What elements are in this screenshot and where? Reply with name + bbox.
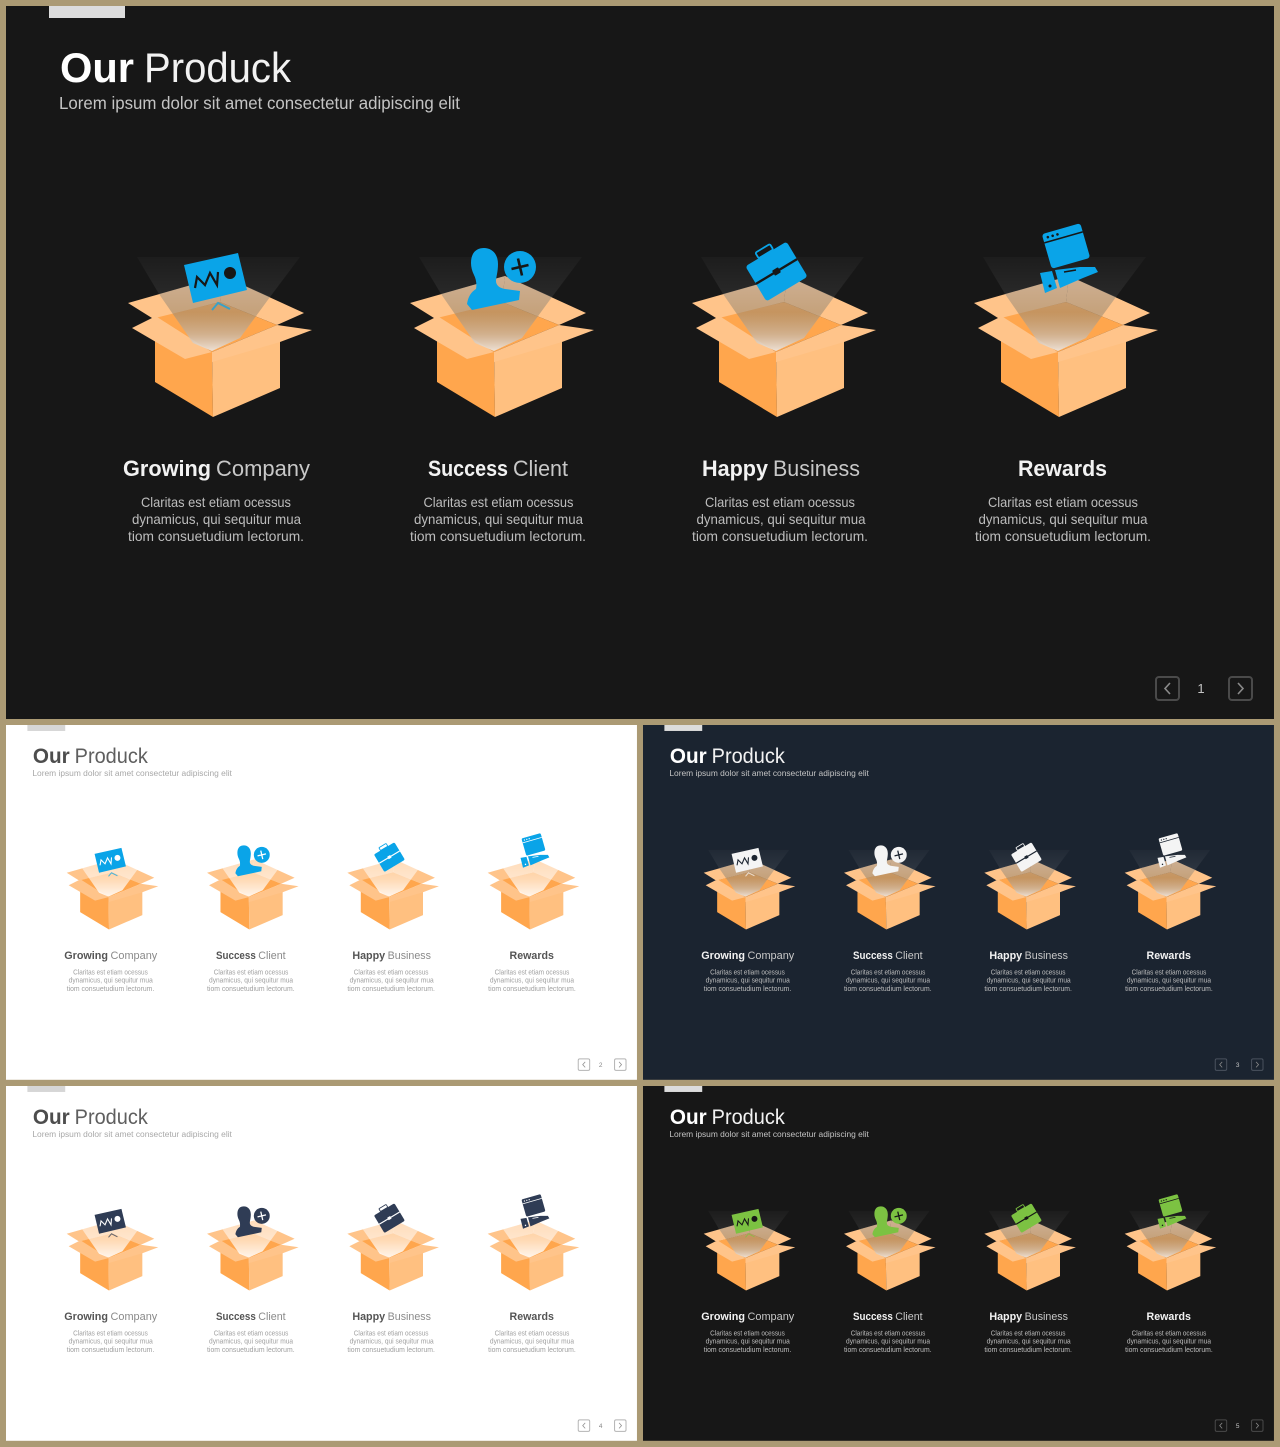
product: Happy Business xyxy=(347,1200,439,1354)
heading: Success xyxy=(853,1311,893,1323)
heading xyxy=(216,950,286,962)
description: Claritas est etiam ocessus xyxy=(495,969,570,976)
icon: briefcase xyxy=(372,1200,405,1233)
heading: Company xyxy=(110,1311,158,1323)
description: dynamicus, qui sequitur mua xyxy=(209,1339,293,1346)
icon: briefcase xyxy=(372,839,405,872)
description: Claritas est etiam ocessus xyxy=(214,1330,289,1337)
description: dynamicus, qui sequitur mua xyxy=(987,978,1071,985)
header tab xyxy=(49,6,125,18)
heading xyxy=(702,456,860,481)
heading: Business xyxy=(1025,1311,1068,1323)
box illustration xyxy=(704,850,795,930)
description: tiom consuetudium lectorum. xyxy=(844,1347,932,1354)
box illustration xyxy=(347,859,439,930)
description xyxy=(984,969,1072,993)
box illustration xyxy=(1125,1211,1216,1291)
description: dynamicus, qui sequitur mua xyxy=(706,1339,790,1346)
product: Rewards xyxy=(1125,1194,1216,1354)
heading xyxy=(216,1311,286,1323)
description: tiom consuetudium lectorum. xyxy=(975,528,1151,544)
product: Happy Business xyxy=(692,236,876,544)
title: Produck xyxy=(75,745,148,768)
heading xyxy=(853,950,923,962)
description xyxy=(347,1330,435,1354)
description: tiom consuetudium lectorum. xyxy=(67,1347,154,1354)
description: Claritas est etiam ocessus xyxy=(1132,969,1207,976)
description: tiom consuetudium lectorum. xyxy=(984,986,1072,993)
icon: presentation board xyxy=(95,848,126,876)
header tab xyxy=(27,1086,65,1092)
title xyxy=(33,745,148,768)
description: tiom consuetudium lectorum. xyxy=(67,986,154,993)
box illustration xyxy=(347,1220,439,1291)
description: dynamicus, qui sequitur mua xyxy=(1127,1339,1211,1346)
description xyxy=(410,494,586,544)
icon: browser window and hand xyxy=(1158,1194,1186,1229)
heading: Company xyxy=(747,1311,795,1323)
heading: Rewards xyxy=(510,1311,554,1323)
product: Rewards xyxy=(1125,833,1216,993)
description: dynamicus, qui sequitur mua xyxy=(350,978,434,985)
panel: white slide 4 xyxy=(6,1086,637,1441)
description: dynamicus, qui sequitur mua xyxy=(706,978,790,985)
icon: browser window and hand xyxy=(521,833,549,868)
description xyxy=(975,494,1151,544)
subtitle: Lorem ipsum dolor sit amet consectetur adipiscing elit xyxy=(32,1129,232,1139)
box illustration xyxy=(984,1211,1076,1291)
description: tiom consuetudium lectorum. xyxy=(410,528,586,544)
title: Our xyxy=(33,745,70,768)
heading: Rewards xyxy=(1018,456,1107,481)
description: Claritas est etiam ocessus xyxy=(710,969,785,976)
description xyxy=(207,1330,295,1354)
product: Growing Company xyxy=(701,1209,795,1354)
pager: 2 xyxy=(599,1062,603,1069)
product: Success Client xyxy=(410,248,594,544)
product: Happy Business xyxy=(347,839,439,993)
pager: 1 xyxy=(1197,681,1205,696)
pager xyxy=(1215,1420,1263,1431)
description: tiom consuetudium lectorum. xyxy=(1125,986,1213,993)
heading xyxy=(853,1311,923,1323)
heading: Business xyxy=(1025,950,1068,962)
description: tiom consuetudium lectorum. xyxy=(207,986,295,993)
description: dynamicus, qui sequitur mua xyxy=(69,978,153,985)
description xyxy=(704,1330,791,1354)
description: Claritas est etiam ocessus xyxy=(214,969,289,976)
description: tiom consuetudium lectorum. xyxy=(347,1347,435,1354)
description: dynamicus, qui sequitur mua xyxy=(490,978,574,985)
description xyxy=(128,494,304,544)
subtitle: Lorem ipsum dolor sit amet consectetur adipiscing elit xyxy=(32,768,232,778)
subtitle: Lorem ipsum dolor sit amet consectetur adipiscing elit xyxy=(59,93,460,113)
heading: Rewards xyxy=(1147,1311,1191,1323)
description: dynamicus, qui sequitur mua xyxy=(987,1339,1071,1346)
product: Happy Business xyxy=(984,1200,1076,1354)
header tab xyxy=(664,1086,702,1092)
product: Success Client xyxy=(844,845,936,993)
heading xyxy=(352,950,431,962)
icon: presentation board xyxy=(184,253,247,310)
box illustration xyxy=(67,859,158,930)
icon: browser window and hand xyxy=(1158,833,1186,868)
heading: Success xyxy=(428,456,508,481)
product: Rewards xyxy=(488,833,579,993)
description: tiom consuetudium lectorum. xyxy=(692,528,868,544)
heading: Happy xyxy=(352,950,386,962)
icon: presentation board xyxy=(732,848,763,876)
description: tiom consuetudium lectorum. xyxy=(347,986,435,993)
description: Claritas est etiam ocessus xyxy=(73,1330,148,1337)
box illustration xyxy=(844,850,936,930)
icon: briefcase xyxy=(742,236,808,301)
description: dynamicus, qui sequitur mua xyxy=(846,1339,930,1346)
title: Produck xyxy=(712,745,785,768)
heading xyxy=(701,1311,795,1323)
heading: Rewards xyxy=(1147,950,1191,962)
product: Growing Company xyxy=(701,848,795,993)
panel: dark slide 5 with green icons xyxy=(643,1086,1274,1441)
description: Claritas est etiam ocessus xyxy=(141,494,291,510)
box illustration xyxy=(984,850,1076,930)
description: tiom consuetudium lectorum. xyxy=(488,1347,576,1354)
icon: presentation board xyxy=(95,1209,126,1237)
heading: Success xyxy=(216,950,256,962)
title xyxy=(33,1106,148,1129)
heading: Business xyxy=(388,1311,431,1323)
heading: Company xyxy=(216,456,310,481)
subtitle: Lorem ipsum dolor sit amet consectetur adipiscing elit xyxy=(669,1129,869,1139)
heading: Happy xyxy=(702,456,769,481)
box illustration xyxy=(207,1220,299,1291)
box illustration xyxy=(410,257,594,417)
title: Our xyxy=(33,1106,70,1129)
box illustration xyxy=(207,859,299,930)
pager: 4 xyxy=(599,1423,603,1430)
description: tiom consuetudium lectorum. xyxy=(704,986,791,993)
icon: add user xyxy=(467,248,536,310)
description xyxy=(704,969,791,993)
description: tiom consuetudium lectorum. xyxy=(207,1347,295,1354)
description: dynamicus, qui sequitur mua xyxy=(350,1339,434,1346)
description: dynamicus, qui sequitur mua xyxy=(978,511,1148,527)
description xyxy=(984,1330,1072,1354)
description: Claritas est etiam ocessus xyxy=(495,1330,570,1337)
title: Our xyxy=(670,745,707,768)
heading xyxy=(428,456,568,481)
heading xyxy=(352,1311,431,1323)
description: Claritas est etiam ocessus xyxy=(710,1330,785,1337)
box illustration xyxy=(488,1220,579,1291)
description: Claritas est etiam ocessus xyxy=(424,494,574,510)
product: Success Client xyxy=(207,845,299,993)
title: Produck xyxy=(712,1106,785,1129)
description: tiom consuetudium lectorum. xyxy=(1125,1347,1213,1354)
heading: Client xyxy=(895,1311,923,1323)
description: dynamicus, qui sequitur mua xyxy=(846,978,930,985)
description: Claritas est etiam ocessus xyxy=(991,969,1066,976)
description: tiom consuetudium lectorum. xyxy=(488,986,576,993)
description: tiom consuetudium lectorum. xyxy=(984,1347,1072,1354)
description: dynamicus, qui sequitur mua xyxy=(69,1339,153,1346)
pager: 5 xyxy=(1236,1423,1240,1430)
box illustration xyxy=(974,257,1158,417)
title: Produck xyxy=(144,44,292,91)
subtitle: Lorem ipsum dolor sit amet consectetur adipiscing elit xyxy=(669,768,869,778)
icon: add user xyxy=(872,845,907,876)
product: Rewards xyxy=(488,1194,579,1354)
description: dynamicus, qui sequitur mua xyxy=(490,1339,574,1346)
header tab xyxy=(664,725,702,731)
product: Success Client xyxy=(207,1206,299,1354)
heading: Business xyxy=(773,456,860,481)
heading: Client xyxy=(513,456,568,481)
description xyxy=(844,1330,932,1354)
description: tiom consuetudium lectorum. xyxy=(128,528,304,544)
title: Our xyxy=(60,44,134,91)
icon: briefcase xyxy=(1009,1200,1042,1233)
pager xyxy=(578,1420,626,1431)
box illustration xyxy=(704,1211,795,1291)
heading: Client xyxy=(258,1311,286,1323)
box illustration xyxy=(692,257,876,417)
header tab xyxy=(27,725,65,731)
icon: add user xyxy=(235,845,270,876)
description xyxy=(347,969,435,993)
heading: Growing xyxy=(123,456,211,481)
description: dynamicus, qui sequitur mua xyxy=(132,511,301,527)
heading xyxy=(123,456,310,481)
heading: Company xyxy=(747,950,795,962)
description: Claritas est etiam ocessus xyxy=(988,494,1138,510)
product: Rewards xyxy=(974,223,1158,544)
product: Happy Business xyxy=(984,839,1076,993)
icon: browser window and hand xyxy=(1040,223,1098,293)
heading xyxy=(701,950,795,962)
description: Claritas est etiam ocessus xyxy=(705,494,855,510)
heading xyxy=(64,1311,158,1323)
box illustration xyxy=(128,257,312,417)
icon: add user xyxy=(872,1206,907,1237)
description: Claritas est etiam ocessus xyxy=(851,969,926,976)
heading xyxy=(64,950,158,962)
icon: presentation board xyxy=(732,1209,763,1237)
heading: Happy xyxy=(352,1311,386,1323)
heading: Happy xyxy=(989,950,1023,962)
icon: add user xyxy=(235,1206,270,1237)
title: Our xyxy=(670,1106,707,1129)
description xyxy=(1125,969,1213,993)
description: dynamicus, qui sequitur mua xyxy=(1127,978,1211,985)
heading: Rewards xyxy=(510,950,554,962)
description: dynamicus, qui sequitur mua xyxy=(696,511,866,527)
box illustration xyxy=(67,1220,158,1291)
description xyxy=(67,969,154,993)
panel: navy slide 3 xyxy=(643,725,1274,1080)
panel: main dark slide xyxy=(6,6,1274,719)
pager: 3 xyxy=(1236,1062,1240,1069)
heading: Company xyxy=(110,950,158,962)
pager xyxy=(578,1059,626,1070)
heading xyxy=(989,950,1068,962)
heading: Client xyxy=(258,950,286,962)
heading: Success xyxy=(216,1311,256,1323)
description: Claritas est etiam ocessus xyxy=(354,969,429,976)
heading: Client xyxy=(895,950,923,962)
description: tiom consuetudium lectorum. xyxy=(704,1347,791,1354)
product: Success Client xyxy=(844,1206,936,1354)
heading: Business xyxy=(388,950,431,962)
product: Growing Company xyxy=(64,848,158,993)
description: Claritas est etiam ocessus xyxy=(851,1330,926,1337)
description: Claritas est etiam ocessus xyxy=(1132,1330,1207,1337)
description xyxy=(1125,1330,1213,1354)
product: Growing Company xyxy=(123,253,312,544)
title: Produck xyxy=(75,1106,148,1129)
pager xyxy=(1215,1059,1263,1070)
heading: Growing xyxy=(701,1311,745,1323)
product: Growing Company xyxy=(64,1209,158,1354)
heading: Growing xyxy=(64,1311,108,1323)
panel: white slide 2 xyxy=(6,725,637,1080)
description xyxy=(488,969,576,993)
description xyxy=(67,1330,154,1354)
description: tiom consuetudium lectorum. xyxy=(844,986,932,993)
description: Claritas est etiam ocessus xyxy=(991,1330,1066,1337)
description: dynamicus, qui sequitur mua xyxy=(414,511,583,527)
box illustration xyxy=(1125,850,1216,930)
description xyxy=(488,1330,576,1354)
description xyxy=(692,494,868,544)
box illustration xyxy=(844,1211,936,1291)
heading: Growing xyxy=(701,950,745,962)
heading: Success xyxy=(853,950,893,962)
box illustration xyxy=(488,859,579,930)
description: Claritas est etiam ocessus xyxy=(73,969,148,976)
title xyxy=(670,1106,785,1129)
icon: briefcase xyxy=(1009,839,1042,872)
pager xyxy=(1156,677,1252,700)
heading: Happy xyxy=(989,1311,1023,1323)
description: dynamicus, qui sequitur mua xyxy=(209,978,293,985)
description xyxy=(844,969,932,993)
title xyxy=(60,44,292,91)
icon: browser window and hand xyxy=(521,1194,549,1229)
description: Claritas est etiam ocessus xyxy=(354,1330,429,1337)
heading xyxy=(989,1311,1068,1323)
heading: Growing xyxy=(64,950,108,962)
title xyxy=(670,745,785,768)
description xyxy=(207,969,295,993)
